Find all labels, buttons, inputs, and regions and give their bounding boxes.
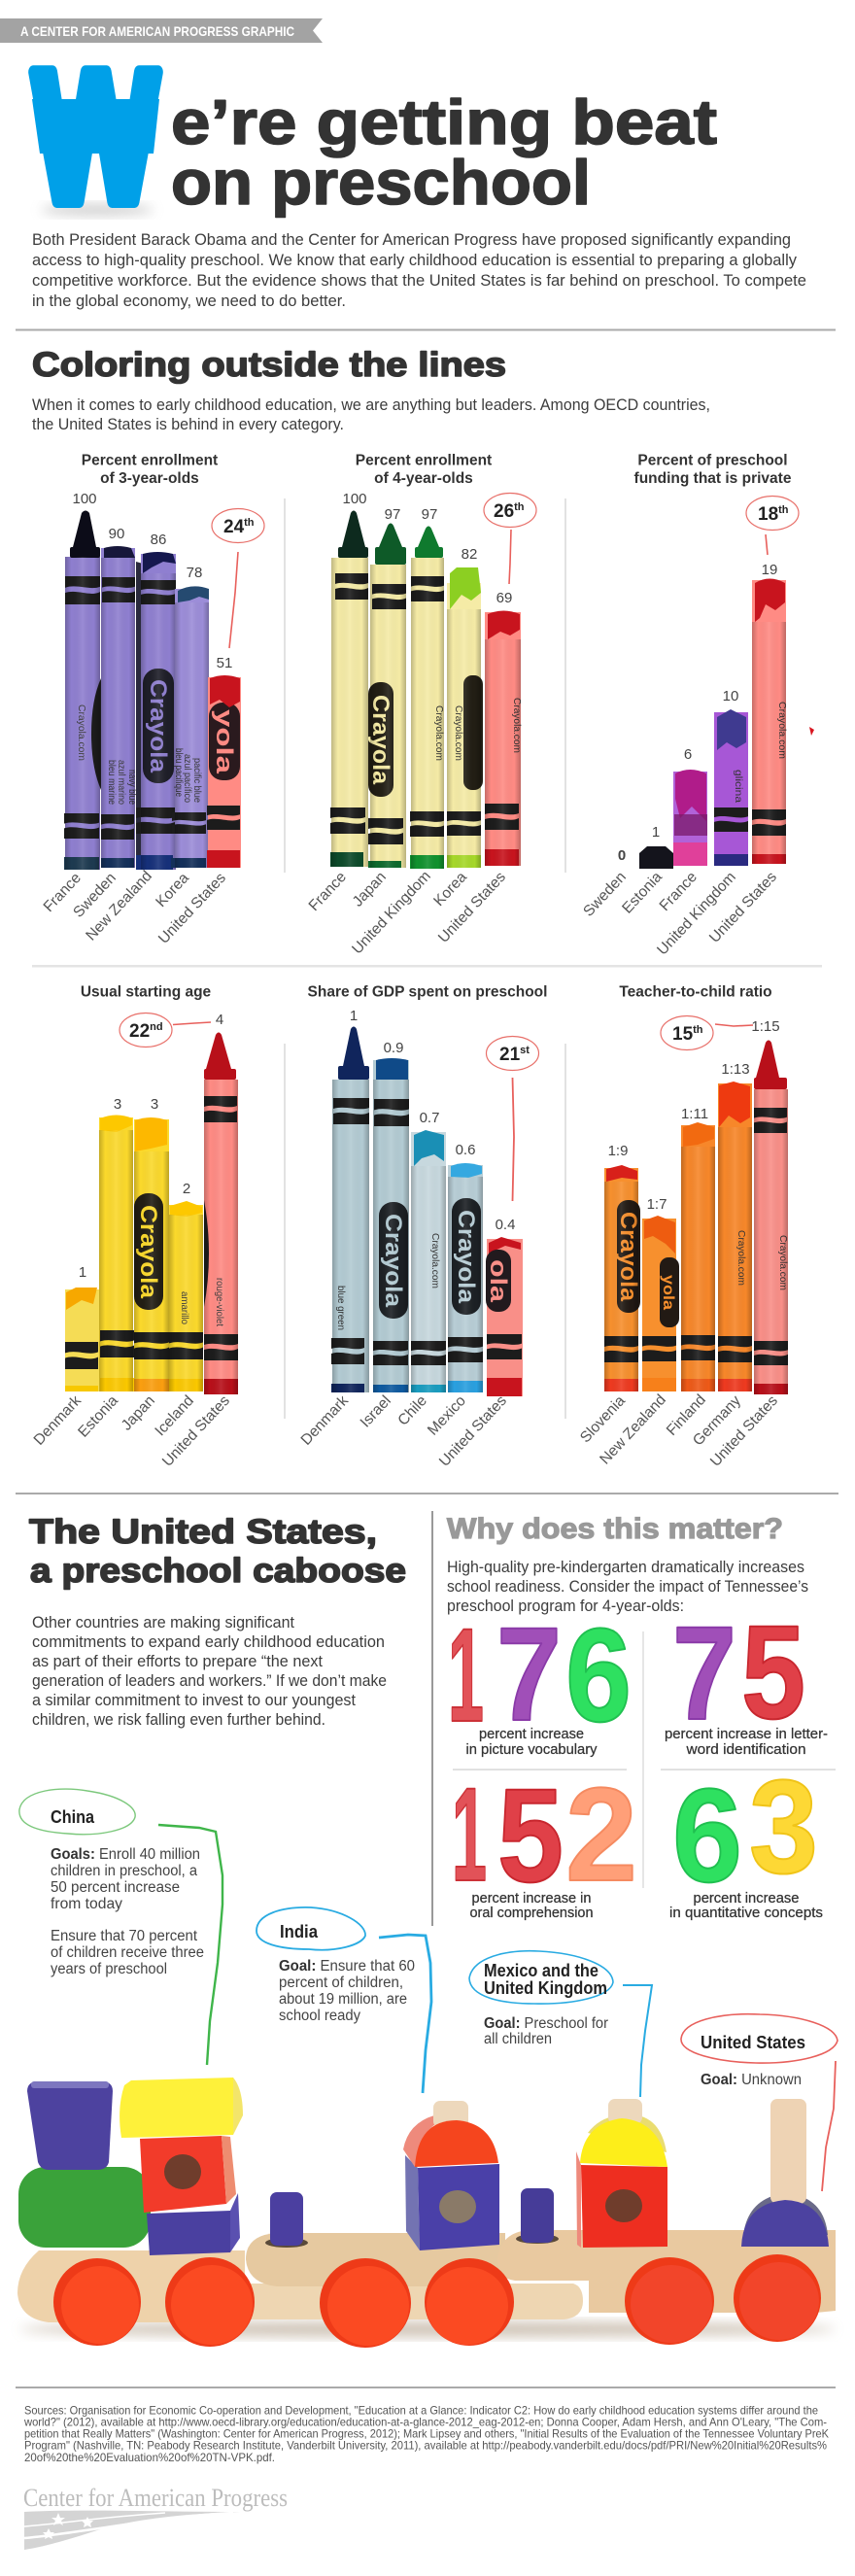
value labels — [342, 491, 512, 606]
caption: oral comprehension — [470, 1905, 593, 1921]
country labels: Estonia — [619, 869, 666, 917]
crayon: United States — [485, 1237, 523, 1396]
crayon: United States: Crayola.com — [777, 1235, 788, 1290]
rank callout: 15th: 15 — [672, 1024, 693, 1045]
arrow line — [822, 2061, 836, 2191]
value labels: 1:15 — [751, 1018, 780, 1035]
heading: why does this matter: Why does this matter? — [447, 1513, 783, 1545]
country labels: Finland — [664, 1391, 709, 1439]
crayon: Germany — [718, 1082, 752, 1391]
caption: percent increase — [479, 1726, 584, 1742]
arrow line — [158, 1825, 222, 2065]
chart heading: Percent enrollment — [356, 453, 492, 468]
scribbled circle — [681, 2014, 838, 2063]
crayon: Japan — [367, 523, 406, 868]
crayon: United States: rouge-violet — [214, 1278, 224, 1326]
chart heading: Share of GDP spent on preschool — [308, 983, 547, 1001]
value labels — [618, 562, 777, 864]
caboose text: children, we risk falling even further behind. — [32, 1711, 325, 1729]
chart: percent enrollment of 3-year-olds — [41, 453, 264, 947]
caption: percent increase in — [472, 1890, 591, 1906]
value labels: 6 — [684, 746, 692, 763]
value labels: 0.6 — [456, 1142, 475, 1158]
crayon: United States — [752, 579, 787, 864]
value labels: 3 — [151, 1096, 158, 1113]
value labels: 4 — [216, 1012, 223, 1028]
title: on preschool — [171, 147, 591, 218]
value labels: 90 — [109, 526, 124, 542]
caption: percent increase — [694, 1890, 799, 1906]
crayon: United States — [207, 675, 241, 868]
value labels: 78 — [187, 565, 202, 581]
value labels: 1 — [350, 1008, 358, 1024]
rank callout: 22nd: nd — [150, 1021, 163, 1033]
crayon: Germany: Crayola.com — [735, 1230, 746, 1286]
car 1 dome — [403, 2101, 498, 2167]
rank callout: 18th: th — [778, 504, 789, 516]
rank callout: 21st: 21 — [499, 1045, 520, 1065]
crayon: France: Crayola.com — [76, 704, 86, 761]
arrow line — [623, 1985, 652, 2097]
country labels: Japan — [119, 1392, 158, 1434]
chart: percent enrollment of 4-year-olds — [306, 453, 536, 957]
callout: China — [19, 1789, 222, 2065]
chart: share of GDP spent on preschool — [298, 983, 547, 1470]
caption — [669, 1890, 823, 1921]
stat: 152 — [452, 1761, 637, 1921]
country labels: Israel — [358, 1392, 394, 1430]
callout: Mexico and the United Kingdom: Mexico and the — [484, 1961, 598, 1980]
crayon: Slovenia — [604, 1165, 641, 1391]
rank callout: 18th: 18 — [758, 504, 778, 525]
value labels — [72, 491, 232, 671]
ground shadow — [19, 2321, 836, 2337]
country labels: New Zealand — [597, 1391, 669, 1468]
country labels — [580, 869, 780, 958]
chart heading: Percent of preschool — [637, 453, 788, 468]
crayon: Chile — [411, 1130, 446, 1392]
value labels: 1:13 — [721, 1061, 750, 1078]
caption — [470, 1890, 593, 1921]
value labels: 97 — [422, 506, 437, 523]
car 1 block — [405, 2155, 499, 2250]
number — [448, 1600, 632, 1750]
crayon: Sweden: navy blue — [126, 770, 137, 805]
crayon: Israel: Crayola — [380, 1214, 406, 1308]
country labels: Denmark — [298, 1392, 352, 1449]
heading: caboose: The United States, — [29, 1513, 377, 1551]
rank callout: 21st: st — [520, 1045, 530, 1056]
caboose text: a similar commitment to invest to our youngest — [32, 1692, 356, 1709]
crayon: Japan: Crayola — [135, 1205, 161, 1299]
stat: 75 — [665, 1598, 828, 1758]
callout: United States — [681, 2014, 838, 2191]
value labels: 82 — [462, 546, 477, 563]
flag swoosh — [24, 2511, 240, 2550]
country labels: United States — [155, 870, 229, 947]
value labels: 51 — [217, 655, 232, 671]
caboose text: Other countries are making significant — [32, 1614, 294, 1631]
caboose text: commitments to expand early childhood education — [32, 1633, 385, 1651]
rank callout: 15th: th — [693, 1024, 703, 1036]
value labels: 0 — [618, 847, 626, 864]
number: 7 — [496, 1600, 562, 1749]
chart heading: Usual starting age — [81, 983, 212, 1001]
number — [672, 1598, 805, 1748]
tail dome — [741, 2099, 829, 2247]
ribbon: graphic label — [0, 18, 323, 43]
chart heading: of 3-year-olds — [100, 470, 199, 487]
crayon: Korea — [447, 567, 483, 868]
crayon: Estonia — [639, 846, 673, 869]
crayon: Japan — [134, 1117, 169, 1391]
crayon: Denmark — [331, 1026, 369, 1392]
intro text: access to high-quality preschool. We know that early childhood education is essential to preparing a globally — [32, 252, 798, 269]
number: 7 — [672, 1599, 736, 1748]
chart heading: of 4-year-olds — [374, 470, 473, 487]
crayon: United Kingdom: Crayola.com — [433, 705, 444, 761]
crayon: France — [673, 770, 707, 866]
callout: Mexico and the United Kingdom — [469, 1951, 652, 2097]
goals text — [51, 1846, 204, 1977]
scribbled circle — [19, 1789, 135, 1835]
country labels: New Zealand — [83, 868, 155, 945]
caption: in quantitative concepts — [669, 1905, 823, 1921]
callout: United States: United States — [701, 2033, 805, 2052]
rank callout: 24th: 24 — [223, 517, 244, 537]
crayon: United Kingdom: glicina — [733, 770, 743, 804]
value labels: 1:9 — [608, 1143, 628, 1159]
scribbled circle — [469, 1951, 613, 2004]
heading: coloring outside the lines: Coloring outside the lines — [32, 346, 506, 384]
number: 3 — [749, 1753, 818, 1902]
crayon: Sweden: azul marino — [116, 760, 126, 805]
country labels: Sweden — [580, 869, 630, 920]
crayon: Israel — [373, 1058, 409, 1392]
peg 2 — [516, 2188, 559, 2244]
goal text — [484, 2015, 608, 2047]
goals text: Ensure that 70 percent — [51, 1928, 198, 1944]
crayon: New Zealand — [136, 552, 176, 870]
why text: High-quality pre-kindergarten dramatically increases — [447, 1559, 804, 1576]
chart heading: funding that is private — [634, 470, 792, 487]
purple base block — [147, 2193, 240, 2255]
caption — [665, 1726, 828, 1758]
goals text: Goals: Enroll 40 million — [51, 1846, 200, 1863]
rank callout: 22nd — [120, 1013, 211, 1048]
wood car 1 — [246, 2233, 505, 2286]
crayon: Japan: Crayola — [367, 695, 393, 785]
country labels: France — [657, 869, 701, 914]
crayon: United States: Crayola.com — [511, 698, 522, 753]
country labels: Korea — [430, 869, 470, 910]
wood lower layer — [248, 2284, 583, 2319]
value labels: 97 — [385, 506, 400, 523]
crayon: New Zealand: Crayola — [145, 679, 171, 773]
caption: word identification — [685, 1741, 806, 1758]
goals text: of children receive three — [51, 1944, 204, 1961]
country labels: United States — [706, 869, 780, 946]
green boiler — [18, 2167, 151, 2248]
sources: 20of%20the%20Evaluation%20of%20TN-VPK.pdf. — [24, 2451, 275, 2464]
chart: usual starting age — [31, 983, 238, 1470]
value labels: 0.4 — [496, 1217, 515, 1233]
crayon: Chile: Crayola.com — [429, 1233, 440, 1288]
rank callout: 26th: th — [514, 501, 525, 513]
country labels — [577, 1391, 781, 1470]
value labels: 3 — [114, 1096, 121, 1113]
callout: India — [256, 1907, 431, 2093]
goal text: Goal: Unknown — [701, 2072, 802, 2088]
chimney — [27, 2081, 113, 2170]
callout: China: China — [51, 1807, 95, 1827]
chart: teacher-to-child ratio — [577, 983, 788, 1470]
crayon: United States: Crayola.com — [776, 702, 787, 759]
crayon: United Kingdom — [410, 527, 444, 869]
country labels: Chile — [394, 1392, 430, 1429]
chart heading — [634, 453, 792, 487]
title — [32, 31, 717, 241]
intro text: competitive workforce. But the evidence shows that the United States is far behind on preschool. To compete — [32, 272, 806, 290]
country labels: Iceland — [152, 1392, 197, 1439]
goal text: Goal: Ensure that 60 — [279, 1958, 415, 1975]
value labels: 100 — [342, 491, 367, 507]
crayon: New Zealand: yola — [660, 1275, 676, 1310]
goal text: about 19 million, are — [279, 1991, 407, 2008]
goal text: school ready — [279, 2008, 360, 2024]
value labels — [79, 1012, 223, 1281]
car 2 dome — [580, 2099, 667, 2167]
rank callout: 26th — [484, 494, 536, 584]
number: 1 — [448, 1601, 484, 1750]
crayon: Finland — [681, 1122, 715, 1391]
why text: preschool program for 4-year-olds: — [447, 1597, 684, 1615]
caption: percent increase in letter- — [665, 1726, 828, 1742]
crayon: New Zealand — [642, 1216, 679, 1391]
crayon: Slovenia: Crayola — [615, 1212, 641, 1302]
goals text: children in preschool, a — [51, 1863, 197, 1879]
caption — [466, 1726, 598, 1758]
rank callout: 22nd: 22 — [129, 1021, 150, 1042]
logo: Center for American Progress — [23, 2484, 288, 2550]
number — [452, 1761, 637, 1910]
number: 6 — [672, 1762, 742, 1910]
yellow roof — [120, 2078, 243, 2138]
caboose text: generation of leaders and workers.” If we don’t make — [32, 1672, 387, 1690]
chart heading — [82, 453, 218, 487]
chart heading: Teacher-to-child ratio — [619, 983, 772, 1001]
why text — [447, 1559, 808, 1615]
why text: school readiness. Consider the impact of Tennessee’s — [447, 1578, 808, 1596]
value labels — [608, 1018, 780, 1213]
crayon: Korea — [171, 586, 209, 868]
chart heading — [356, 453, 492, 487]
caboose text — [32, 1614, 387, 1729]
crayon: United States — [485, 610, 522, 866]
goal text: all children — [484, 2031, 552, 2047]
ribbon: graphic label: A CENTER FOR AMERICAN PROGRESS GRAPHIC — [20, 23, 294, 39]
crayon: Iceland — [169, 1201, 203, 1391]
number: 1 — [452, 1761, 487, 1909]
heading: caboose — [29, 1513, 406, 1590]
country labels: Denmark — [31, 1392, 85, 1449]
crayon: United States: yola — [211, 709, 237, 774]
goals text: from today — [51, 1896, 122, 1912]
value labels: 10 — [723, 688, 738, 704]
country labels: Germany — [690, 1392, 744, 1449]
red cab — [140, 2136, 236, 2213]
crayon: United States: ola — [485, 1259, 511, 1303]
value labels: 100 — [72, 491, 97, 507]
intro text: in the global economy, we need to do better. — [32, 292, 346, 310]
car 2 block — [576, 2151, 667, 2248]
crayon: Sweden — [101, 546, 137, 868]
sources — [23, 2404, 829, 2464]
crayon: Denmark — [65, 1288, 99, 1391]
country labels: Japan — [350, 869, 390, 910]
number: 2 — [565, 1761, 637, 1909]
crayon: United Kingdom — [714, 709, 748, 866]
crayon: Mexico — [448, 1163, 483, 1392]
value labels: 0.9 — [384, 1040, 403, 1056]
rank callout: 24th — [212, 509, 264, 648]
country labels — [41, 868, 229, 947]
heading: caboose: a preschool caboose — [30, 1552, 406, 1590]
value labels: 0.7 — [420, 1110, 439, 1126]
goals text: 50 percent increase — [51, 1879, 180, 1896]
goals text: years of preschool — [51, 1961, 167, 1977]
wood locomotive base — [17, 2250, 245, 2322]
icon: red crayon fleck — [809, 727, 814, 736]
country labels: France — [41, 870, 85, 915]
rank callout: 26th: 26 — [494, 501, 514, 522]
intro text — [32, 231, 806, 310]
title: W — [33, 31, 158, 241]
wheels — [53, 2254, 821, 2348]
country labels: France — [306, 869, 350, 914]
goal text: Goal: Preschool for — [484, 2015, 608, 2032]
crayon: Mexico: Crayola — [453, 1210, 479, 1304]
callout: Mexico and the United Kingdom: United Kingdom — [484, 1978, 607, 1998]
country labels: United Kingdom — [654, 869, 739, 958]
scribbled circle — [256, 1907, 365, 1950]
crayon: Korea: azul pacífico — [182, 754, 192, 803]
title: e’re getting beat — [171, 86, 717, 157]
goal text — [279, 1958, 415, 2024]
number: 5 — [741, 1598, 805, 1747]
callout: India: India — [280, 1922, 319, 1941]
section intro: When it comes to early childhood education, we are anything but leaders. Among OECD countries, — [32, 396, 710, 414]
chart: percent of preschool funding that is private — [580, 453, 814, 958]
value labels: 86 — [151, 532, 166, 548]
crayon: Denmark: blue green — [335, 1286, 346, 1330]
chart heading: Percent enrollment — [82, 453, 218, 468]
country labels: United States — [436, 1392, 510, 1470]
country labels — [298, 1392, 510, 1470]
number — [672, 1753, 818, 1910]
number: 6 — [565, 1601, 632, 1750]
country labels: United States — [159, 1392, 233, 1470]
country labels — [31, 1392, 233, 1470]
crayon: Sweden: bleu marine — [106, 760, 117, 805]
crayon: Korea: bleu pacifique — [173, 748, 184, 797]
value labels: 1:7 — [647, 1196, 667, 1213]
value labels: 1 — [652, 824, 660, 841]
country labels: Korea — [153, 870, 192, 910]
value labels: 2 — [183, 1181, 190, 1197]
value labels: 1 — [79, 1264, 86, 1281]
value labels: 19 — [762, 562, 777, 578]
caption: in picture vocabulary — [466, 1741, 598, 1758]
crayon: Estonia — [99, 1116, 134, 1391]
crayon: Korea: Crayola.com — [453, 705, 463, 761]
crayon: United States — [754, 1040, 788, 1394]
stat: 176 — [448, 1600, 632, 1758]
stat: 63 — [669, 1753, 823, 1921]
value labels: 69 — [496, 590, 512, 606]
value labels — [350, 1008, 515, 1233]
number: 5 — [497, 1762, 564, 1910]
country labels: United States — [707, 1392, 781, 1470]
arrow line — [379, 1935, 431, 2093]
crayon: France — [330, 511, 368, 867]
country labels: Mexico — [425, 1392, 469, 1439]
crayon: United States — [204, 1032, 238, 1394]
country labels: Estonia — [75, 1392, 121, 1441]
country labels: United States — [435, 869, 509, 946]
goal text: percent of children, — [279, 1975, 403, 1991]
value labels: 1:11 — [681, 1106, 708, 1122]
rank callout: 21st — [486, 1036, 538, 1201]
section intro — [32, 396, 710, 433]
country labels: Sweden — [70, 870, 120, 921]
crayon: Iceland: amarillo — [179, 1291, 189, 1324]
crayon: Korea: pacific blue — [191, 758, 202, 803]
rank callout: 24th: th — [244, 517, 255, 529]
rank callout: 15th — [661, 1016, 753, 1049]
country labels: Slovenia — [577, 1392, 629, 1446]
peg 1 — [265, 2192, 308, 2248]
wood car 2 — [497, 2230, 836, 2313]
caboose text: as part of their efforts to prepare “the next — [32, 1653, 323, 1670]
section intro: the United States is behind in every category. — [32, 416, 344, 433]
logo: Center for American Progress: Center for American Progress — [23, 2484, 288, 2512]
intro text: Both President Barack Obama and the Center for American Progress have proposed significantly expanding — [32, 231, 791, 249]
toy train — [17, 2078, 836, 2348]
country labels — [306, 868, 509, 957]
rank callout: 18th — [746, 496, 799, 555]
country labels: United Kingdom — [349, 868, 434, 957]
crayon: France — [64, 511, 101, 870]
